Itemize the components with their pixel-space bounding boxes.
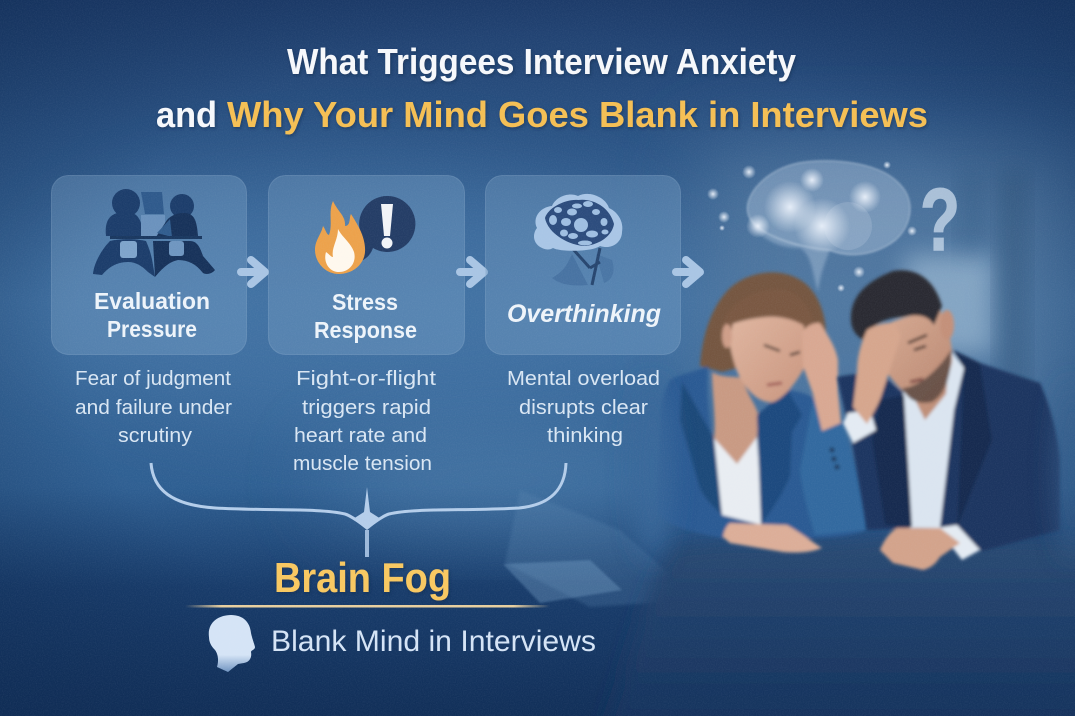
- panel: evaluation pressure: [52, 176, 246, 354]
- text: overthinking description: thinking: [547, 424, 623, 447]
- man face: [868, 310, 952, 402]
- panel: stress response: [268, 176, 464, 354]
- man cuff: [843, 410, 876, 443]
- woman raised hand: [802, 323, 841, 431]
- man neck: [915, 372, 948, 420]
- text: evaluation description: Fear of judgment: [75, 367, 231, 390]
- woman face: [727, 316, 807, 402]
- illustration: stressed man: [837, 270, 1060, 570]
- illustration: glowing brain: [707, 161, 917, 292]
- icon: tangled brain: [534, 194, 622, 285]
- text: evaluation description: scrutiny: [118, 424, 193, 447]
- text: stress description: heart rate and: [294, 424, 427, 447]
- label: stress response: Response: [314, 317, 417, 343]
- arrow 3: [676, 260, 700, 284]
- man jacket: [837, 350, 1060, 551]
- man shirt: [903, 350, 964, 528]
- arrow 2: [460, 260, 484, 284]
- icon: head silhouette: [209, 615, 255, 672]
- illustration: stressed woman: [656, 272, 866, 553]
- title line 2: Why Your Mind Goes Blank in Interviews: [227, 94, 928, 135]
- label: evaluation pressure: Pressure: [107, 316, 197, 342]
- laptop ghost: [503, 490, 700, 607]
- title line 2: and: [156, 94, 217, 135]
- icon: interview silhouettes: [93, 189, 215, 277]
- heading: brain fog: Brain Fog: [274, 554, 451, 601]
- woman hair back: [700, 272, 826, 372]
- divider rule: [185, 605, 550, 608]
- title line 1: What Triggees Interview Anxiety: [287, 41, 796, 82]
- arrow 1: [241, 260, 265, 284]
- label: overthinking: Overthinking: [507, 300, 661, 328]
- table: [600, 538, 1075, 716]
- panel: overthinking: [486, 176, 680, 354]
- label: stress response: [314, 289, 417, 343]
- text: evaluation description: and failure under: [75, 396, 232, 419]
- text: stress description: muscle tension: [293, 452, 432, 475]
- text: stress description: [293, 367, 436, 475]
- label: evaluation pressure: [94, 288, 210, 342]
- icon: question mark: ?: [920, 170, 960, 269]
- icon: flame: [315, 201, 365, 274]
- title: [156, 41, 928, 135]
- text: stress description: triggers rapid: [302, 396, 431, 419]
- brace connector: [151, 463, 566, 557]
- woman lower hand: [723, 523, 822, 553]
- label: evaluation pressure: Evaluation: [94, 288, 210, 314]
- text: blank mind in interviews: Blank Mind in Interviews: [271, 625, 596, 658]
- text: overthinking description: [507, 367, 660, 447]
- label: stress response: Stress: [332, 289, 398, 315]
- woman jacket: [656, 366, 866, 538]
- man raised hand: [853, 323, 901, 424]
- woman hair front: [722, 289, 815, 345]
- mist over figures: [632, 380, 1075, 560]
- text: overthinking description: disrupts clear: [519, 396, 648, 419]
- text: evaluation description: [75, 367, 232, 447]
- man lower hand: [880, 528, 960, 570]
- man hair: [851, 270, 942, 340]
- woman shirt: [713, 437, 763, 525]
- sparkles: [707, 161, 917, 292]
- text: overthinking description: Mental overload: [507, 367, 660, 390]
- icon: speech bubble alert: [358, 196, 415, 262]
- man lower cuff: [937, 525, 980, 560]
- woman neck: [712, 372, 758, 466]
- text: stress description: Fight-or-flight: [296, 367, 436, 390]
